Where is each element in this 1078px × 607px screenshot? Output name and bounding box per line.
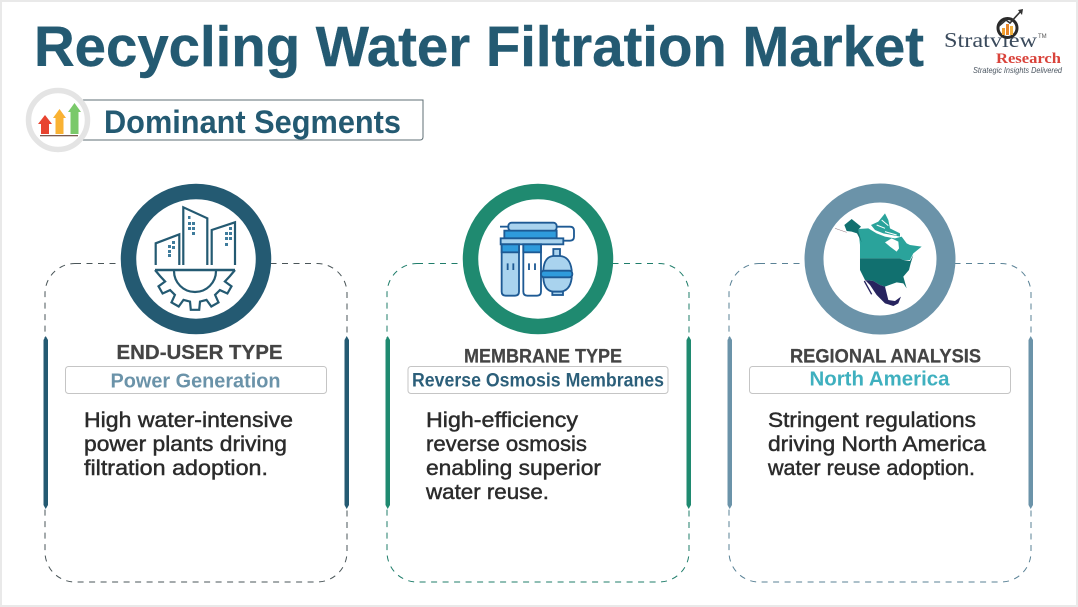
description: enabling superior — [426, 457, 601, 480]
trademark: TM — [1038, 34, 1047, 40]
icon: magnifier with growth arrow — [998, 9, 1023, 38]
description: reverse osmosis — [426, 433, 587, 456]
label box — [66, 366, 326, 394]
panel heading: MEMBRANE TYPE — [464, 346, 622, 368]
description: Stringent regulations — [768, 409, 976, 432]
side bar left — [44, 336, 48, 509]
logo tagline: Strategic Insights Delivered — [973, 66, 1062, 75]
panel: end-user type — [44, 192, 349, 582]
ring — [128, 192, 264, 326]
label box — [750, 366, 1010, 394]
section heading: Dominant Segments — [28, 90, 423, 150]
icon: water filter system — [500, 223, 574, 296]
ring — [814, 193, 946, 325]
side bar right — [686, 336, 691, 509]
dashed card frame — [45, 264, 347, 582]
icon: rising arrows — [28, 90, 88, 150]
logo: Stratview Research — [944, 9, 1062, 75]
title: Recycling Water Filtration Market — [34, 15, 924, 79]
description — [84, 409, 293, 480]
description: driving North America — [768, 433, 986, 456]
description: water reuse. — [425, 481, 549, 504]
panel: membrane type — [386, 192, 691, 582]
description: High water-intensive — [84, 409, 293, 432]
heading frame — [70, 100, 423, 140]
description — [767, 409, 986, 480]
icon: North America map — [835, 213, 922, 306]
description: High-efficiency — [426, 409, 579, 432]
icon: buildings on gear — [155, 207, 235, 310]
side bar right — [1028, 336, 1033, 509]
description — [425, 409, 601, 504]
dashed card frame — [387, 264, 689, 582]
side bar left — [386, 336, 390, 509]
segment name: Power Generation — [110, 370, 280, 392]
description: power plants driving — [84, 433, 287, 456]
panel heading: END-USER TYPE — [116, 342, 282, 364]
side bar right — [344, 336, 349, 509]
label box — [408, 366, 668, 394]
description: filtration adoption. — [84, 457, 268, 480]
panel: regional analysis — [728, 193, 1033, 582]
description: water reuse adoption. — [767, 457, 975, 480]
dashed card frame — [729, 264, 1031, 582]
logo research: Research — [996, 51, 1062, 67]
heading text: Dominant Segments — [104, 104, 401, 140]
segment name: Reverse Osmosis Membranes — [412, 370, 664, 392]
side bar left — [728, 336, 732, 509]
panel heading: REGIONAL ANALYSIS — [790, 346, 981, 368]
ring — [470, 192, 606, 326]
logo wordmark: Stratview — [944, 28, 1038, 52]
segment name: North America — [810, 368, 950, 390]
